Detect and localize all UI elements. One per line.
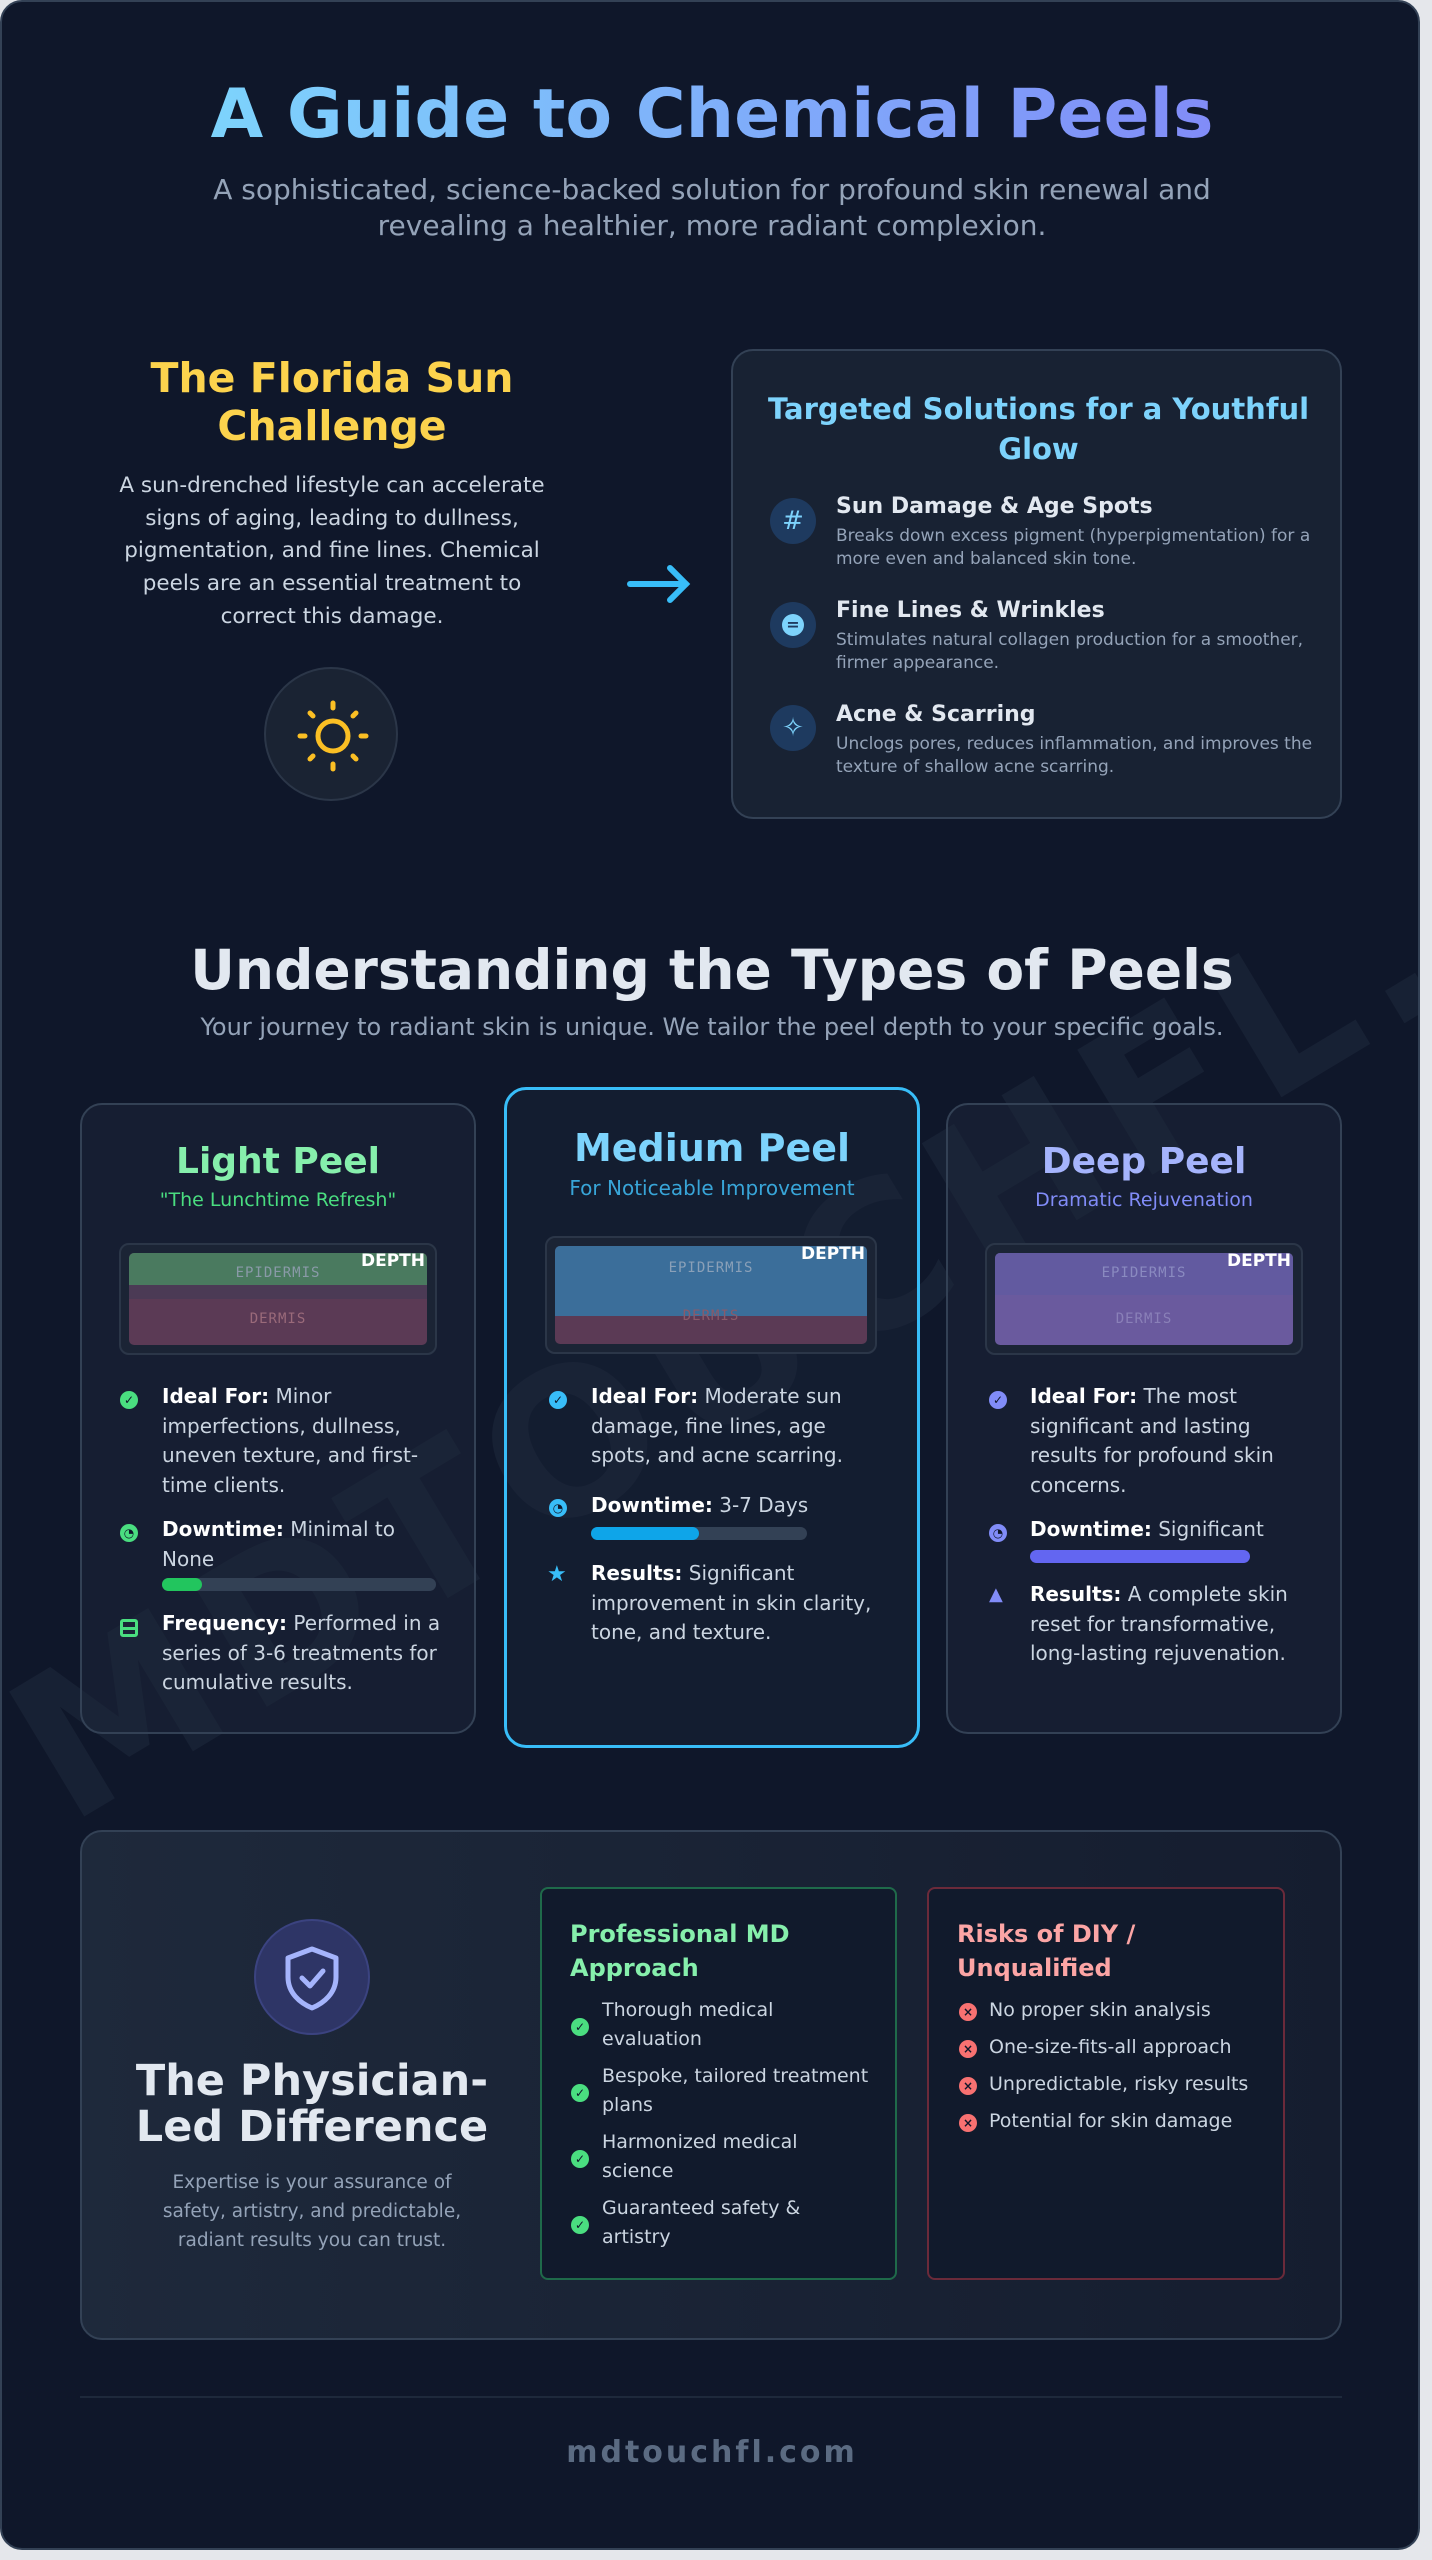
arrow [627, 565, 690, 603]
text: × [963, 2079, 973, 2093]
panel: risks: Risks of DIY / Unqualified [957, 1920, 1135, 1982]
icon: sparkle [770, 705, 816, 751]
light items: ✓ [124, 1393, 134, 1407]
section subtitle: Your journey to radiant skin is unique. We tailor the peel depth to your specific goals. [200, 1013, 1224, 1041]
text: Bespoke, tailored treatment plans [602, 2065, 868, 2116]
panel: deep peel: Deep Peel [1042, 1141, 1246, 1182]
panel: light peel: EPIDERMIS [236, 1265, 320, 1281]
text: × [963, 2005, 973, 2019]
panel: light peel: DEPTH [361, 1251, 425, 1271]
panel: light peel [80, 1103, 476, 1734]
text: Stimulates natural collagen production for a smoother, firmer appearance. [836, 630, 1303, 673]
florida text: A sun-drenched lifestyle can accelerate signs of aging, leading to dullness, pigmentation, and fine lines. Chemical peels are an essential treatment to correct this damage. [119, 473, 545, 629]
deep items [989, 1391, 1007, 1409]
icon: hash [770, 498, 816, 544]
text: ✓ [575, 2218, 585, 2232]
text: ★ [547, 1562, 567, 1587]
panel: light peel: "The Lunchtime Refresh" [160, 1189, 396, 1211]
text: Downtime: Minimal to None [162, 1517, 395, 1570]
heading: The Physician-Led Difference [136, 2056, 488, 2152]
panel: risks [927, 1887, 1285, 2280]
text: × [963, 2042, 973, 2056]
panel: targeted solutions [731, 349, 1342, 819]
text: Unclogs pores, reduces inflammation, and improves the texture of shallow acne scarring. [836, 734, 1312, 777]
text: Frequency: Performed in a series of 3-6 treatments for cumulative results. [162, 1611, 440, 1694]
text: Ideal For: Moderate sun damage, fine lines, age spots, and acne scarring. [591, 1384, 843, 1467]
panel: professional: Professional MD Approach [570, 1920, 790, 1982]
text: Results: Significant improvement in skin clarity, tone, and texture. [591, 1561, 871, 1644]
panel: light peel: DERMIS [250, 1311, 306, 1327]
text: Downtime: Significant [1030, 1517, 1264, 1541]
text: ✓ [575, 2020, 585, 2034]
text: ▲ [989, 1584, 1003, 1605]
deep items: ✓ [993, 1393, 1003, 1407]
panel: deep peel [946, 1103, 1342, 1734]
panel: light peel: Light Peel [176, 1141, 380, 1182]
item: acne: Acne & Scarring [836, 702, 1036, 727]
item: sun damage: Sun Damage & Age Spots [836, 494, 1153, 519]
text: ✓ [575, 2086, 585, 2100]
panel: medium peel: EPIDERMIS [669, 1260, 753, 1276]
medium items [549, 1391, 567, 1409]
text: Results: A complete skin reset for transformative, long-lasting rejuvenation. [1030, 1582, 1288, 1665]
text: Potential for skin damage [989, 2110, 1232, 2132]
icon: shield [254, 1919, 370, 2035]
panel: medium peel: For Noticeable Improvement [569, 1176, 855, 1200]
icon: sun [264, 667, 398, 801]
panel: medium peel: Medium Peel [574, 1126, 850, 1170]
text: ◔ [553, 1501, 563, 1515]
text: Downtime: 3-7 Days [591, 1493, 808, 1517]
text: Unpredictable, risky results [989, 2073, 1248, 2095]
text: Breaks down excess pigment (hyperpigmentation) for a more even and balanced skin tone. [836, 526, 1310, 569]
panel: deep peel: DEPTH [1227, 1251, 1291, 1271]
text: One-size-fits-all approach [989, 2036, 1232, 2058]
text: ◔ [124, 1526, 134, 1540]
heading: Targeted Solutions for a Youthful Glow [768, 392, 1309, 466]
text: ✓ [575, 2152, 585, 2166]
title: A Guide to Chemical Peels [211, 75, 1213, 154]
panel: deep peel: EPIDERMIS [1102, 1265, 1186, 1281]
section heading: Understanding the Types of Peels [190, 938, 1234, 1002]
panel: deep peel: DERMIS [1116, 1311, 1172, 1327]
item: fine lines: Fine Lines & Wrinkles [836, 598, 1105, 623]
icon: lines [770, 602, 816, 648]
text: Guaranteed safety & artistry [602, 2197, 800, 2248]
florida heading: The Florida Sun Challenge [151, 354, 513, 450]
panel: medium peel [504, 1087, 920, 1748]
subtitle: A sophisticated, science-backed solution for profound skin renewal and revealing a healthier, more radiant complexion. [213, 173, 1211, 242]
icon: hash: # [782, 506, 804, 536]
text: ◔ [993, 1526, 1003, 1540]
footer: mdtouchfl.com [566, 2435, 858, 2470]
panel: physician-led [80, 1830, 1342, 2340]
panel: medium peel: DERMIS [683, 1308, 739, 1324]
icon: lines: = [786, 615, 800, 634]
panel: deep peel: Dramatic Rejuvenation [1035, 1189, 1253, 1211]
text: Ideal For: The most significant and lasting results for profound skin concerns. [1030, 1384, 1274, 1496]
text: Ideal For: Minor imperfections, dullness, uneven texture, and first-time clients. [162, 1384, 418, 1496]
medium items: ✓ [553, 1393, 563, 1407]
panel: professional [540, 1887, 897, 2280]
light items [120, 1391, 138, 1409]
text: Expertise is your assurance of safety, artistry, and predictable, radiant results you can trust. [163, 2172, 461, 2251]
text: Harmonized medical science [602, 2131, 798, 2182]
text: Thorough medical evaluation [602, 1999, 773, 2050]
panel: medium peel: DEPTH [801, 1244, 865, 1264]
text: No proper skin analysis [989, 1999, 1211, 2021]
icon: sparkle: ✧ [782, 713, 804, 743]
text: × [963, 2116, 973, 2130]
